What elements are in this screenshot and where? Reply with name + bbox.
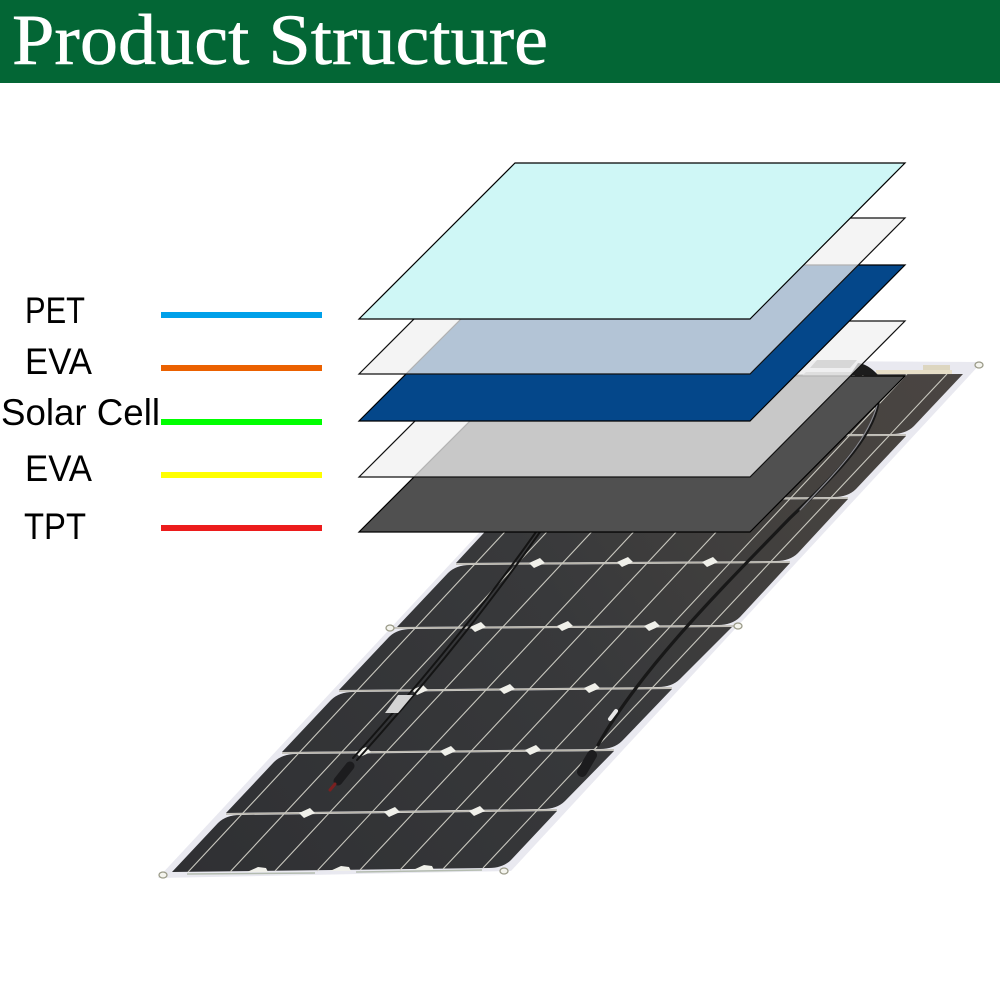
label: TPT: TPT <box>24 506 86 547</box>
row separator lines <box>226 435 906 814</box>
solar cell rows <box>172 374 963 872</box>
label: Solar Cell: Solar Cell <box>1 392 160 433</box>
leader line: Solar Cell <box>161 419 322 425</box>
label: EVA upper: EVA <box>25 341 92 382</box>
leader line: TPT <box>161 525 322 531</box>
mounting eyelets <box>159 362 983 878</box>
left connector <box>338 766 350 781</box>
legend labels and lines <box>1 290 322 547</box>
right cable <box>582 403 878 772</box>
layer: TPT sheet <box>359 376 905 532</box>
bottom edge strips <box>187 870 482 874</box>
left cable <box>330 532 540 790</box>
layer: solar cell sheet <box>359 265 905 421</box>
header banner <box>0 0 1000 83</box>
solar panel photo <box>158 360 983 878</box>
leader line: PET <box>161 312 322 318</box>
junction strip and label <box>802 360 952 376</box>
upper connector mark <box>610 711 616 719</box>
product label sticker <box>385 695 413 713</box>
diagonal busbars <box>188 374 947 872</box>
leader line: EVA upper <box>161 365 322 371</box>
label: EVA lower: EVA <box>25 448 92 489</box>
layer: lower EVA sheet <box>359 321 905 477</box>
right connector <box>582 755 592 772</box>
panel white frame <box>158 360 982 878</box>
layer: upper EVA sheet <box>359 218 905 374</box>
label: PET: PET <box>25 290 85 331</box>
cell corner diamonds <box>247 557 718 872</box>
title: Product Structure <box>12 0 548 80</box>
layer: PET sheet <box>359 163 905 319</box>
leader line: EVA lower <box>161 472 322 478</box>
